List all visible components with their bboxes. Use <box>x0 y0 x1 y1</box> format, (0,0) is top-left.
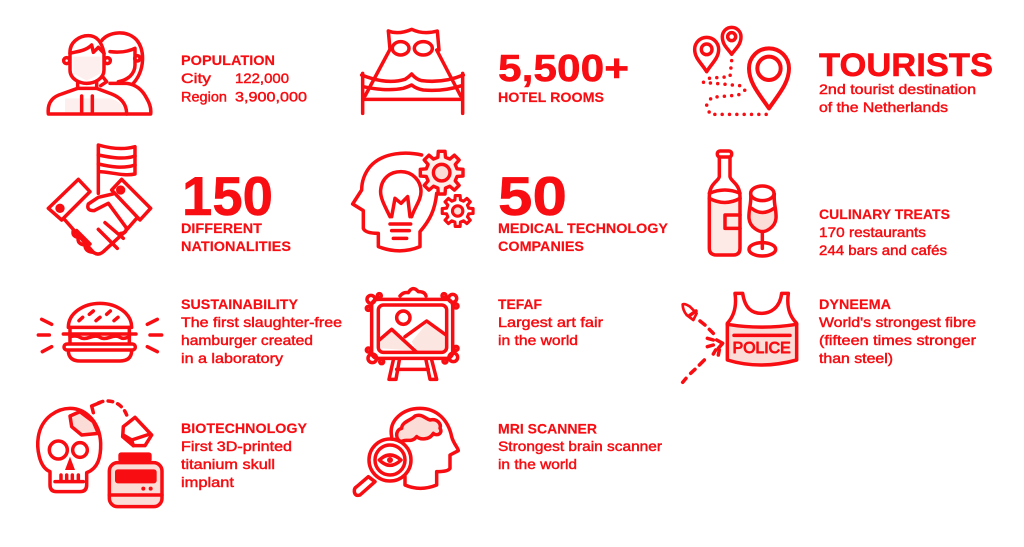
text: hotel rooms <box>498 48 629 105</box>
text: tefaf <box>498 296 603 348</box>
text: tourists: TOURISTS <box>819 47 993 83</box>
icon: hamburger <box>38 303 162 361</box>
text: dyneema: World's strongest fibre <box>819 314 976 330</box>
icon: bed <box>362 29 463 113</box>
text: medical technology: 50 <box>498 165 567 227</box>
text: population: POPULATION <box>181 52 275 68</box>
text: mri scanner: MRI SCANNER <box>498 420 597 436</box>
text: tefaf: TEFAF <box>498 296 542 312</box>
icon: large gear <box>420 151 463 194</box>
text: tefaf: in the world <box>498 332 578 348</box>
label: police: POLICE <box>733 340 791 357</box>
panel: tourists <box>695 27 993 115</box>
text: dyneema: (fifteen times stronger <box>819 332 976 348</box>
text: biotechnology: titanium skull <box>181 456 275 472</box>
text: culinary treats: CULINARY TREATS <box>819 206 950 222</box>
icon: police vest with bullet <box>683 293 797 382</box>
text: sustainability: in a laboratory <box>181 350 283 366</box>
icon: skull and 3D printer <box>38 401 162 507</box>
text: tourists: 2nd tourist destination <box>819 81 976 97</box>
panel: population <box>48 33 307 114</box>
text: nationalities: DIFFERENT <box>181 220 262 236</box>
icon: two people <box>48 33 151 114</box>
text: medical technology: COMPANIES <box>498 238 584 254</box>
icon: wine bottle and glass <box>709 151 776 256</box>
panel: sustainability <box>38 296 342 366</box>
panel: mri scanner <box>354 408 662 495</box>
text: population: City <box>181 70 211 86</box>
text: population <box>181 52 307 104</box>
panel: tefaf <box>366 289 603 379</box>
text: culinary treats: 170 restaurants <box>819 224 926 240</box>
text: population: 122,000 <box>235 70 289 86</box>
text: biotechnology: BIOTECHNOLOGY <box>181 420 308 436</box>
text: mri scanner: in the world <box>498 456 577 472</box>
text: tefaf: Largest art fair <box>498 314 603 330</box>
panel: dyneema <box>683 293 976 382</box>
text: hotel rooms: 5,500+ <box>498 48 629 90</box>
text: culinary treats <box>819 206 950 258</box>
text: mri scanner <box>498 420 662 472</box>
panel: nationalities <box>48 145 291 254</box>
text: biotechnology: First 3D-printed <box>181 438 292 454</box>
panel: biotechnology <box>38 401 308 507</box>
text: nationalities <box>181 165 291 254</box>
text: tourists <box>819 47 993 115</box>
icon: painting on easel <box>366 289 458 379</box>
text: biotechnology: implant <box>181 474 234 490</box>
text: culinary treats: 244 bars and cafés <box>819 242 947 258</box>
text: dyneema: than steel) <box>819 350 893 366</box>
text: sustainability: SUSTAINABILITY <box>181 296 299 312</box>
icon: handshake with flag <box>48 145 151 254</box>
text: tourists: of the Netherlands <box>819 99 948 115</box>
text: biotechnology <box>181 420 308 490</box>
text: population: 3,900,000 <box>235 88 307 104</box>
panel: medical technology <box>353 151 669 254</box>
icon: map pins with route <box>695 27 789 114</box>
text: mri scanner: Strongest brain scanner <box>498 438 662 454</box>
text: sustainability: The first slaughter-free <box>181 314 342 330</box>
icon: head with brain and magnifier <box>354 408 458 495</box>
text: population: Region <box>181 88 227 104</box>
text: nationalities: 150 <box>182 165 273 227</box>
text: dyneema: DYNEEMA <box>819 296 891 312</box>
icon: small gear <box>442 196 473 226</box>
panel: culinary treats <box>709 151 950 258</box>
text: medical technology <box>498 165 669 254</box>
icon: head with bulb and gears <box>353 151 473 251</box>
text: sustainability <box>181 296 342 366</box>
text: nationalities: NATIONALITIES <box>181 238 291 254</box>
text: hotel rooms: HOTEL ROOMS <box>498 89 604 105</box>
text: sustainability: hamburger created <box>181 332 313 348</box>
text: dyneema <box>819 296 976 366</box>
text: medical technology: MEDICAL TECHNOLOGY <box>498 220 669 236</box>
panel: hotel rooms <box>362 29 629 113</box>
